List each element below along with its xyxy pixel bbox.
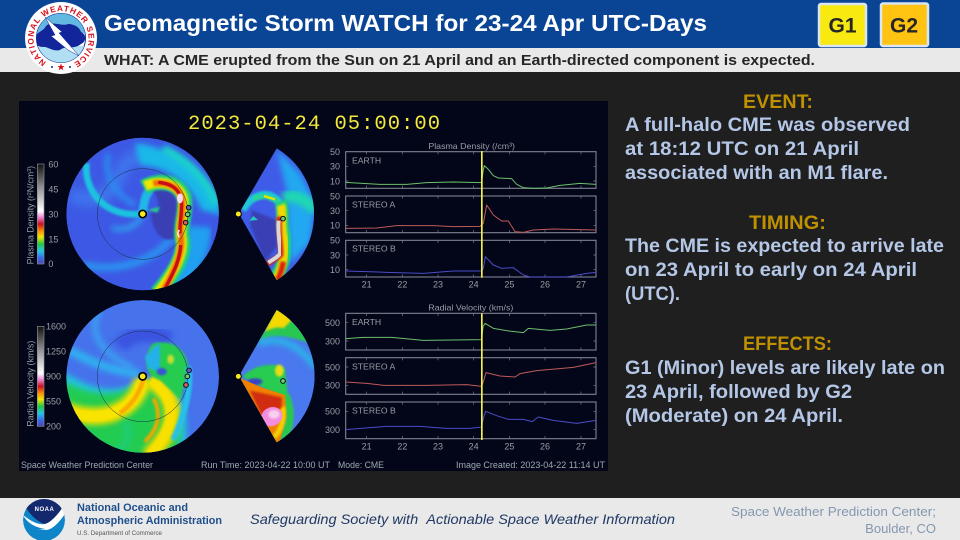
wedge: plasma density meridional — [241, 148, 314, 280]
text block: effects: G1 (Minor) levels are likely late on — [625, 358, 945, 379]
colour bar: plasma density: Plasma Density (r²N/cm³) — [26, 166, 36, 264]
colour bar: radial velocity: 900 — [46, 371, 61, 381]
chart: plasma density time series: Plasma Density (/cm³) — [428, 141, 515, 151]
colour bar: plasma density: 60 — [48, 159, 58, 169]
colour bar: plasma density: 15 — [48, 234, 58, 244]
footer band — [0, 498, 960, 540]
chart: plasma density time series: 50 — [330, 147, 340, 157]
chart: plasma density time series: 10 — [330, 221, 340, 231]
disc: radial velocity ecliptic — [63, 300, 219, 460]
model image footer text: Mode: CME — [338, 460, 384, 470]
reference orbit — [97, 169, 188, 259]
chart: plasma density time series: 50 — [330, 236, 340, 246]
colour bar: radial velocity: Radial Velocity (km/s) — [26, 341, 36, 427]
text block: effects: (Moderate) on 24 April. — [625, 406, 843, 427]
text block: effects: 23 April, followed by G2 — [625, 382, 852, 403]
colour bar: radial velocity: 550 — [46, 396, 61, 406]
credit: SWPC Boulder — [731, 504, 936, 536]
velocity panels — [26, 300, 318, 460]
wedge: radial velocity meridional — [241, 310, 315, 442]
chart: radial velocity time series: 300 — [325, 425, 340, 435]
chart: radial velocity time series: 300 — [325, 381, 340, 391]
reference orbit — [97, 331, 188, 422]
chart: plasma density time series: 21 — [362, 279, 372, 289]
icon: NOAA logo — [23, 499, 66, 540]
chart: plasma density time series: 10 — [330, 176, 340, 186]
chart: radial velocity time series: 23 — [433, 441, 443, 451]
markers: sun and spacecraft — [139, 205, 191, 225]
chart: plasma density time series: 27 — [576, 279, 586, 289]
colour bar: radial velocity — [26, 321, 66, 431]
chart: plasma density time series — [330, 141, 596, 289]
colour bar: radial velocity: 1250 — [46, 346, 66, 356]
chart: plasma density time series: 30 — [330, 250, 340, 260]
chart: plasma density time series: 25 — [504, 279, 514, 289]
agency name: National Oceanic and — [77, 502, 188, 514]
chart: plasma density time series: 10 — [330, 265, 340, 275]
header bar — [0, 0, 960, 48]
model image footer text — [21, 460, 605, 470]
chart: plasma density time series: 23 — [433, 279, 443, 289]
colour bar: plasma density: 45 — [48, 184, 58, 194]
colour bar: plasma density — [26, 159, 58, 269]
model timestamp: 2023-04-24 05:00:00 — [188, 113, 440, 136]
text block: effects — [625, 334, 945, 427]
chart: plasma density time series: STEREO A — [352, 200, 396, 210]
subtitle: what happened: WHAT: A CME erupted from the Sun on 21 April and an Earth-directed component is expected. — [104, 52, 815, 69]
agency name — [77, 502, 222, 537]
wedge markers — [235, 211, 285, 221]
chart: radial velocity time series: 500 — [325, 318, 340, 328]
text block: event: A full-halo CME was observed — [625, 115, 910, 136]
panel: WSA-Enlil model image — [19, 101, 608, 471]
model image footer text: Image Created: 2023-04-22 11:14 UT — [456, 460, 605, 470]
chart: radial velocity time series: STEREO A — [352, 361, 396, 371]
agency name: U.S. Department of Commerce — [77, 531, 163, 537]
agency name: Atmospheric Administration — [77, 515, 222, 527]
text block: timing: The CME is expected to arrive late — [625, 236, 944, 257]
icon: National Weather Service logo: NATIONAL WEATHER SERVICE — [28, 6, 94, 68]
text block: event: associated with an M1 flare. — [625, 163, 888, 184]
badge: G2 — [881, 4, 928, 46]
text block: event: at 18:12 UTC on 21 April — [625, 139, 859, 160]
chart: radial velocity time series: 27 — [576, 441, 586, 451]
chart: radial velocity time series: STEREO B — [352, 406, 396, 416]
tagline: Safeguarding Society with Actionable Space Weather Information — [250, 511, 675, 527]
markers: sun and spacecraft — [139, 368, 191, 387]
chart: radial velocity time series: 300 — [325, 336, 340, 346]
text block: effects: EFFECTS: — [743, 334, 832, 355]
text block: timing — [625, 213, 944, 305]
chart: radial velocity time series: Radial Velocity (km/s) — [428, 303, 513, 313]
chart: radial velocity time series: 26 — [540, 441, 550, 451]
chart: plasma density time series: EARTH — [352, 155, 381, 165]
model image footer text: Run Time: 2023-04-22 10:00 UT — [201, 460, 330, 470]
chart: radial velocity time series: 25 — [504, 441, 514, 451]
chart: plasma density time series: 22 — [397, 279, 407, 289]
text block: timing: TIMING: — [749, 213, 826, 234]
colour bar: plasma density: 0 — [48, 259, 53, 269]
chart: radial velocity time series: 500 — [325, 362, 340, 372]
subtitle band — [0, 48, 960, 72]
density panels — [26, 138, 318, 293]
chart: radial velocity time series: 24 — [469, 441, 479, 451]
chart: radial velocity time series: 22 — [397, 441, 407, 451]
badge: G1 — [819, 4, 866, 46]
title: Geomagnetic Storm WATCH for 23-24 Apr UTC-Days — [104, 10, 707, 36]
wedge markers — [235, 373, 285, 383]
chart: radial velocity time series: 500 — [325, 407, 340, 417]
chart: plasma density time series: 30 — [330, 162, 340, 172]
colour bar: radial velocity: 200 — [46, 421, 61, 431]
badge: G2: G2 — [890, 14, 918, 38]
chart: plasma density time series: 50 — [330, 191, 340, 201]
chart: radial velocity time series: EARTH — [352, 317, 381, 327]
disc: plasma density ecliptic — [66, 138, 222, 293]
model image footer text: Space Weather Prediction Center — [21, 460, 153, 470]
icon: NOAA logo: NOAA — [35, 507, 54, 513]
chart: plasma density time series: 24 — [469, 279, 479, 289]
credit: SWPC Boulder: Boulder, CO — [865, 521, 936, 536]
text block: timing: (UTC). — [625, 284, 680, 305]
text block: event: EVENT: — [743, 92, 813, 113]
chart: plasma density time series: 26 — [540, 279, 550, 289]
chart: radial velocity time series: 21 — [362, 441, 372, 451]
chart: radial velocity time series — [325, 303, 596, 451]
credit: SWPC Boulder: Space Weather Prediction Center; — [731, 504, 936, 519]
text block: timing: on 23 April to early on 24 April — [625, 260, 917, 281]
colour bar: plasma density: 30 — [48, 209, 58, 219]
colour bar: radial velocity: 1600 — [46, 321, 66, 331]
text block: event — [625, 92, 910, 184]
chart: plasma density time series: 30 — [330, 206, 340, 216]
chart: plasma density time series: STEREO B — [352, 244, 396, 254]
badge: G1: G1 — [828, 14, 857, 38]
